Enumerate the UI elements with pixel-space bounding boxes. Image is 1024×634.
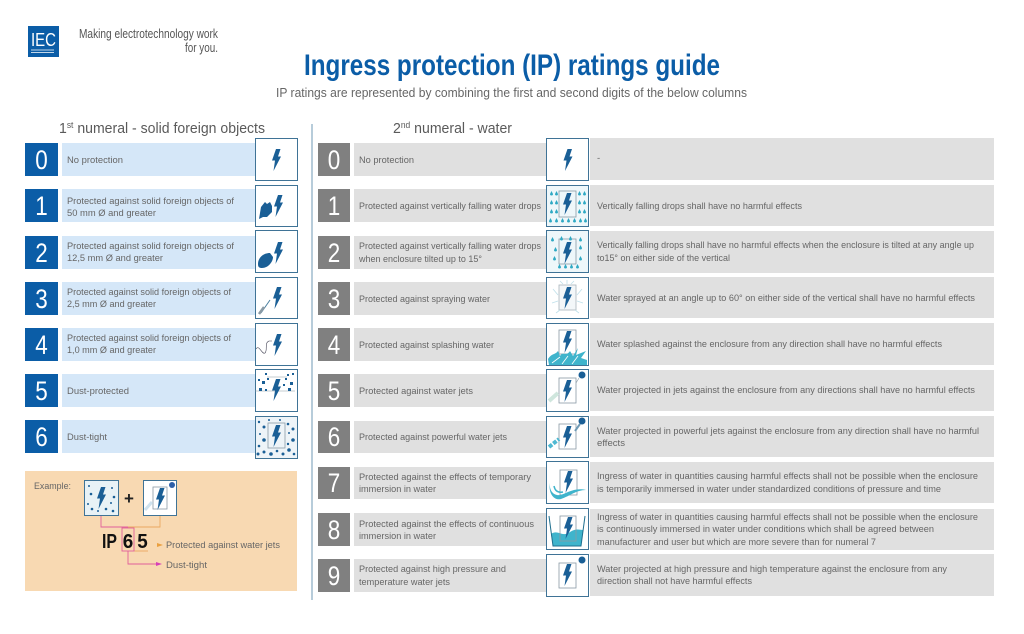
logo: IEC: IEC — [31, 30, 56, 50]
row 1 water: 1 — [328, 191, 340, 221]
row 2 water: 2 — [328, 238, 340, 268]
row 2 water: to15° on either side of the vertical — [597, 253, 730, 264]
callout: water jets: Protected against water jets — [166, 540, 280, 551]
row 8 water: Ingress of water in quantities causing harmful effects shall not be possible when the enclosure — [597, 512, 978, 523]
row 1 solid: Protected against solid foreign objects of — [67, 196, 234, 207]
row 2 water: Vertically falling drops shall have no harmful effects when the enclosure is tilted at any angle up — [597, 240, 974, 251]
row 5 water: Water projected in jets against the enclosure from any directions shall have no harmful effects — [597, 385, 975, 396]
row 4 solid: 4 — [35, 330, 48, 360]
row 6 solid: 6 — [35, 422, 48, 452]
heading: second numeral: 2 — [393, 120, 401, 137]
rating code IP65: 5 — [137, 531, 148, 553]
logo: IEC — [28, 26, 59, 57]
connector lines — [101, 515, 160, 564]
arrow: pink — [156, 562, 162, 566]
callout: dust-tight: Dust-tight — [166, 560, 207, 571]
row 9 water: Water projected at high pressure and high temperature against the enclosure from any — [597, 564, 947, 575]
row 6 water: effects — [597, 438, 625, 449]
row 0 solid — [25, 138, 298, 180]
row 7 water: is temporarily immersed in water under standardized conditions of pressure and time — [597, 484, 941, 495]
row 1 solid: 1 — [35, 191, 48, 221]
example label: Example: — [34, 481, 71, 492]
row 1 water: Vertically falling drops shall have no harmful effects — [597, 201, 802, 212]
row 8 water: manufacturer and user but which are more severe than for numeral 7 — [597, 537, 876, 548]
row 4 water: 4 — [328, 330, 340, 360]
row 6 water: Water projected in powerful jets against the enclosure from any direction shall have no harmful — [597, 426, 979, 437]
row 4 solid — [25, 324, 298, 366]
row 6 water: Protected against powerful water jets — [359, 432, 507, 443]
row 3 solid: 2,5 mm Ø and greater — [67, 299, 156, 310]
icon: dust-tight example — [84, 480, 118, 516]
row 9 water: Protected against high pressure and — [359, 564, 506, 575]
row 3 water: Water sprayed at an angle up to 60° on either side of the vertical shall have no harmful effects — [597, 293, 975, 304]
row 0 water: - — [597, 153, 600, 164]
row 2 water: Protected against vertically falling water drops — [359, 241, 541, 252]
row 9 water: 9 — [328, 561, 340, 591]
row 1 solid — [25, 186, 298, 226]
title: Ingress protection (IP) ratings guide — [304, 49, 720, 82]
row 7 water: immersion in water — [359, 484, 436, 495]
tagline: for you. — [185, 41, 218, 55]
plus sign: + — [124, 489, 134, 508]
row 2 water: when enclosure tilted up to 15° — [358, 254, 482, 265]
rating code IP65: IP — [102, 531, 117, 553]
panel: example — [25, 471, 297, 591]
heading: second numeral: numeral - water — [410, 120, 512, 137]
row 3 water — [318, 277, 994, 318]
row 6 solid — [25, 416, 298, 458]
row 1 water — [318, 185, 994, 226]
row 4 water — [318, 323, 994, 366]
row 3 solid: 3 — [35, 284, 48, 314]
row 5 water: Protected against water jets — [359, 386, 473, 397]
arrow: orange — [157, 543, 163, 547]
rating code IP65: 6 — [123, 531, 133, 553]
row 5 solid — [25, 370, 298, 412]
row 6 water — [318, 416, 994, 458]
tagline — [79, 27, 219, 55]
row 0 solid: No protection — [67, 155, 123, 166]
row 7 water: Protected against the effects of temporary — [359, 472, 531, 483]
panel: water — [318, 138, 994, 596]
row 2 water — [318, 230, 994, 273]
row 7 water — [318, 462, 994, 504]
row 4 solid: Protected against solid foreign objects of — [67, 333, 231, 344]
row 4 water: Water splashed against the enclosure from any direction shall have no harmful effects — [597, 339, 942, 350]
row 2 solid — [25, 230, 298, 272]
row 1 water: Protected against vertically falling water drops — [359, 201, 541, 212]
row 9 water: direction shall not have harmful effects — [597, 576, 752, 587]
row 5 water — [318, 370, 994, 412]
row 3 water: 3 — [328, 284, 340, 314]
row 5 water: 5 — [328, 376, 340, 406]
row 0 solid: 0 — [35, 145, 48, 175]
heading: first numeral: st — [67, 120, 74, 130]
panel: solid foreign objects — [25, 138, 298, 458]
column divider — [312, 124, 313, 600]
heading: second numeral: nd — [401, 120, 410, 130]
row 7 water: 7 — [328, 468, 340, 498]
row 2 solid: 12,5 mm Ø and greater — [67, 253, 163, 264]
row 8 water: 8 — [328, 515, 340, 545]
subtitle: IP ratings are represented by combining the first and second digits of the below columns — [276, 86, 747, 100]
row 2 solid: 2 — [35, 238, 48, 268]
row 2 solid: Protected against solid foreign objects of — [67, 241, 234, 252]
row 6 water: 6 — [328, 422, 340, 452]
tagline: Making electrotechnology work — [79, 27, 219, 41]
row 9 water — [318, 554, 994, 596]
row 5 solid: 5 — [35, 376, 48, 406]
row 3 water: Protected against spraying water — [359, 294, 490, 305]
row 1 solid: 50 mm Ø and greater — [67, 208, 156, 219]
row 3 solid: Protected against solid foreign objects of — [67, 287, 231, 298]
row 7 water: Ingress of water in quantities causing harmful effects shall not be possible when the enclosure — [597, 471, 978, 482]
row 6 solid: Dust-tight — [67, 432, 107, 443]
row 8 water: Protected against the effects of continuous — [359, 519, 534, 530]
row 9 water: temperature water jets — [359, 577, 450, 588]
rating code IP65 — [102, 531, 148, 553]
row 8 water — [318, 508, 994, 550]
row 4 water: Protected against splashing water — [359, 340, 494, 351]
heading: first numeral: 1 — [59, 120, 67, 137]
row 0 water: 0 — [328, 145, 340, 175]
row 5 solid: Dust-protected — [67, 386, 129, 397]
row 8 water: is continuously immersed in water under conditions which shall be agreed between — [597, 524, 934, 535]
row 0 water: No protection — [359, 155, 414, 166]
row 0 water — [318, 138, 994, 180]
icon: water jets example — [144, 480, 176, 516]
row 3 solid — [25, 278, 298, 318]
row 8 water: immersion in water — [359, 531, 436, 542]
row 4 solid: 1,0 mm Ø and greater — [67, 345, 156, 356]
heading: first numeral: numeral - solid foreign objects — [73, 120, 265, 137]
